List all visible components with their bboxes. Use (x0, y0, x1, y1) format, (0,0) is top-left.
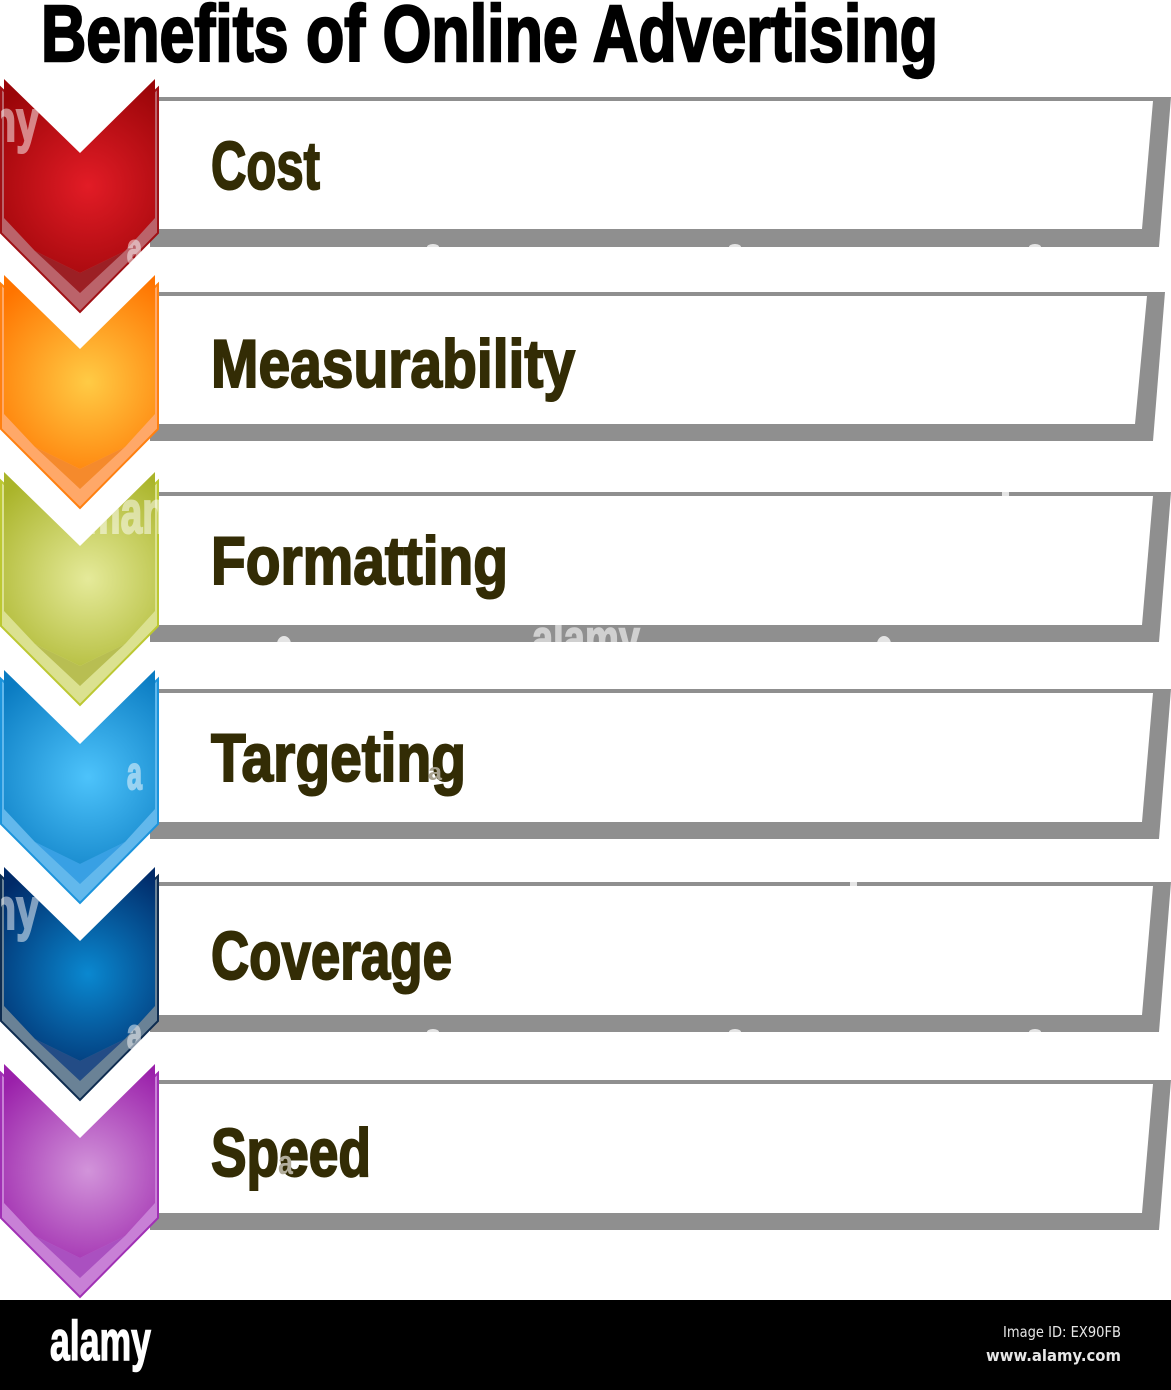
label: Speed: Speed (211, 1115, 371, 1191)
label: Targeting: Targeting (211, 720, 466, 796)
logo: alamy: alamy (50, 1309, 151, 1372)
watermark on band: alamy (532, 610, 640, 666)
label: Measurability: Measurability (211, 326, 575, 402)
icon: light blue chevron (1, 670, 158, 903)
row 6 bar: Speed (150, 1080, 1171, 1230)
label: Formatting: Formatting (211, 523, 508, 599)
website: www.alamy.com (986, 1346, 1121, 1365)
footer band (0, 1300, 1171, 1390)
row 5 bar: Coverage (150, 882, 1171, 1035)
row 1 bar: Cost (150, 97, 1171, 250)
watermark: man (86, 479, 166, 546)
icon: orange chevron (1, 275, 158, 508)
watermark on band (277, 625, 891, 642)
watermark on text: a (278, 1144, 294, 1182)
label: Coverage: Coverage (211, 918, 452, 994)
icon: purple chevron (1, 1064, 158, 1297)
watermark: a (127, 747, 142, 799)
row 3 bar: Formatting (150, 492, 1171, 642)
icon: navy chevron (0, 867, 158, 1100)
image id: Image ID: EX90FB (1003, 1323, 1121, 1341)
row 2 bar: Measurability (150, 292, 1165, 441)
watermark: a (127, 1010, 142, 1057)
icon: red chevron (0, 79, 158, 312)
row 4 bar: Targeting (150, 689, 1171, 839)
watermark on text: a (428, 759, 443, 786)
label: Cost: Cost (211, 128, 320, 204)
icon: olive chevron (1, 472, 166, 705)
watermark: a (127, 225, 142, 272)
